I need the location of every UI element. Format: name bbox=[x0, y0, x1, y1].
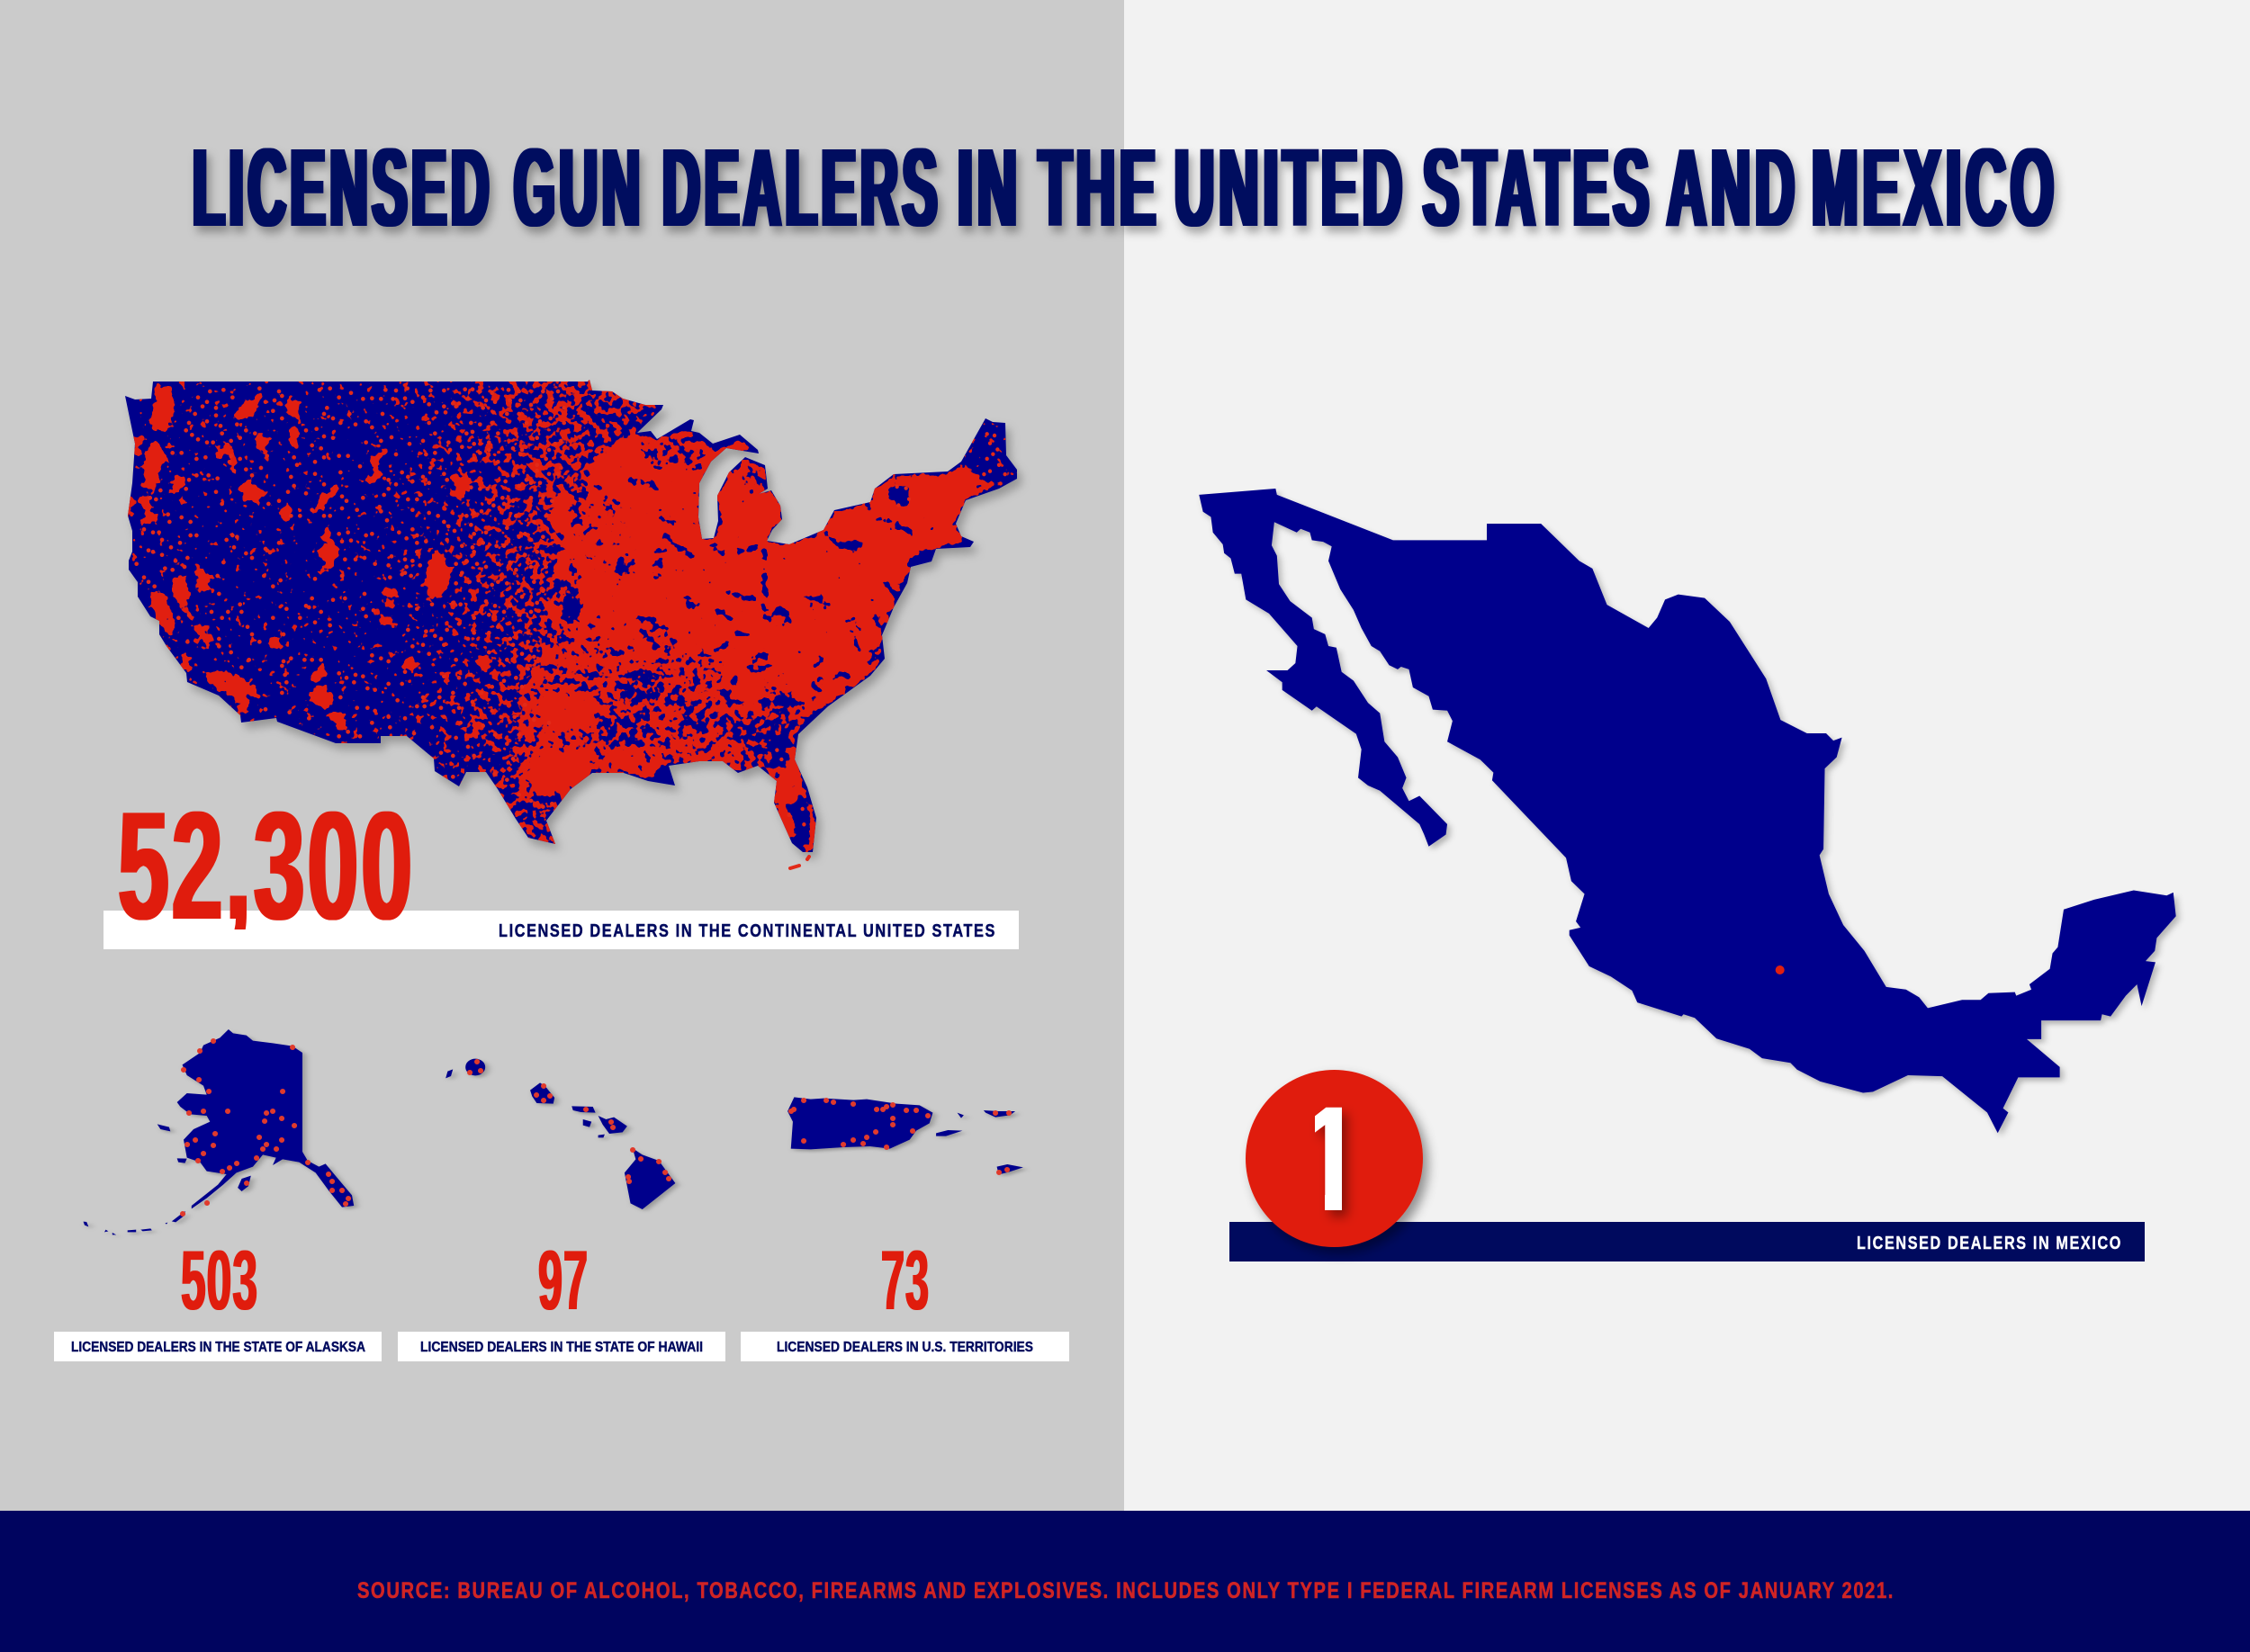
label: Alaska bbox=[54, 1332, 382, 1361]
label bar: continental United States bbox=[104, 911, 1019, 949]
Maine and Adirondack dots bbox=[777, 434, 1005, 824]
title: DEALERS bbox=[662, 127, 941, 250]
title: LICENSED bbox=[193, 127, 493, 250]
west and plains dealer dots bbox=[137, 389, 564, 807]
title bbox=[193, 127, 2058, 250]
footer band bbox=[0, 1511, 2250, 1652]
title: THE bbox=[1039, 127, 1160, 250]
source note: SOURCE: BUREAU OF ALCOHOL, TOBACCO, FIREARMS AND EXPLOSIVES. INCLUDES ONLY TYPE I FEDERAL FIREARM LICENSES AS OF JANUARY 2021. bbox=[357, 1578, 1894, 1603]
map: Mexico bbox=[1199, 489, 2176, 1133]
stat: Hawaii 97: 97 bbox=[538, 1233, 589, 1327]
stat badge: 1 bbox=[1246, 1070, 1423, 1247]
map: Hawaii bbox=[446, 1059, 675, 1209]
title: GUN bbox=[514, 127, 644, 250]
Florida Keys bbox=[790, 857, 809, 868]
title: AND bbox=[1667, 127, 1799, 250]
label: territories bbox=[741, 1332, 1069, 1361]
text: 73 bbox=[881, 1233, 930, 1327]
title: UNITED bbox=[1174, 127, 1407, 250]
map: Alaska bbox=[84, 1029, 354, 1235]
label bar: continental United States: LICENSED DEALERS IN THE CONTINENTAL UNITED STATES bbox=[499, 921, 996, 941]
big number: 52,300: 52,300 bbox=[118, 780, 415, 952]
dealer dot in Mexico bbox=[1776, 965, 1785, 974]
stat: Alaska 503: 503 bbox=[181, 1233, 258, 1327]
stat badge: 1: 1 bbox=[1296, 1076, 1365, 1243]
label bar: Mexico bbox=[1229, 1222, 2145, 1261]
label: Hawaii bbox=[398, 1332, 725, 1361]
label: Alaska: LICENSED DEALERS IN THE STATE OF ALASKSA bbox=[71, 1340, 365, 1355]
label: Hawaii: LICENSED DEALERS IN THE STATE OF HAWAII bbox=[420, 1340, 703, 1355]
panel: left background bbox=[0, 0, 1124, 1511]
title: STATES bbox=[1423, 127, 1653, 250]
map: U.S. territories bbox=[788, 1097, 1023, 1174]
label: territories: LICENSED DEALERS IN U.S. TERRITORIES bbox=[777, 1340, 1033, 1355]
map: continental United States with dealer dots bbox=[117, 373, 1026, 868]
title: IN bbox=[958, 127, 1022, 250]
label bar: Mexico: LICENSED DEALERS IN MEXICO bbox=[1857, 1234, 2122, 1253]
panel: right background bbox=[1124, 0, 2250, 1511]
